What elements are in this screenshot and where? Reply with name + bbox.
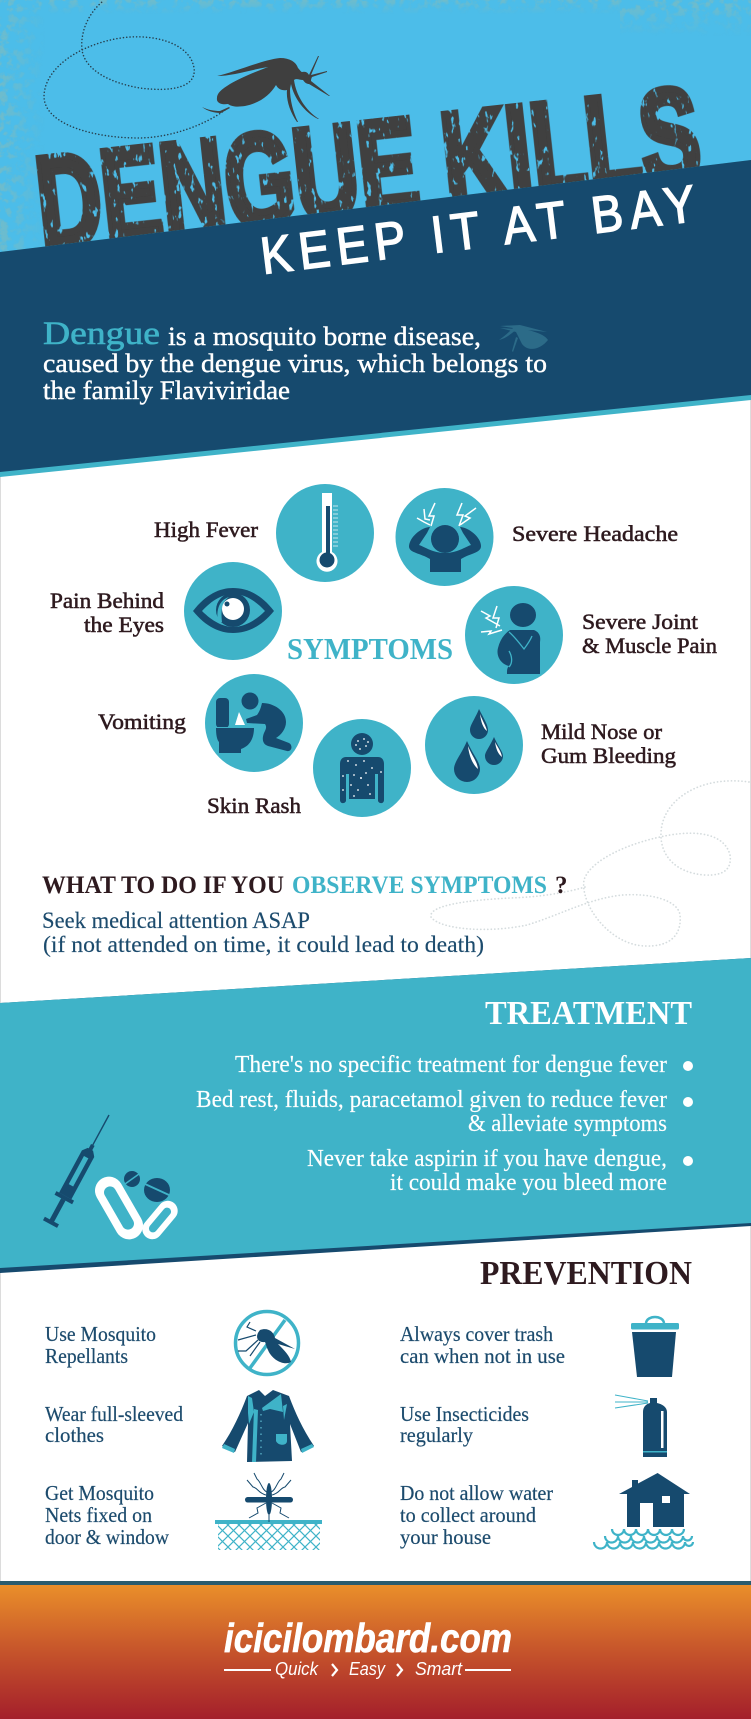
icon: house with water: [594, 1473, 693, 1548]
symptom: high fever: [154, 484, 374, 582]
symptom: skin rash: [207, 719, 411, 818]
header: grunge blue background: [0, 0, 751, 252]
subtitle: Keep it at bay: KEEP IT AT BAY: [257, 175, 699, 285]
intro text: the family Flaviviridae: [43, 376, 290, 405]
symptom: skin rash: Skin Rash: [207, 793, 301, 818]
footer logo text: icicilombard.com: [224, 1615, 512, 1661]
icon: trash can: [631, 1317, 679, 1377]
treatment list: Never take aspirin if you have dengue,: [307, 1146, 667, 1172]
item: full-sleeved clothes: clothes: [45, 1423, 104, 1447]
heading: what to do: WHAT TO DO IF YOU: [42, 872, 284, 899]
icon: pills: [90, 1171, 182, 1244]
icon: mosquito on net: [215, 1473, 322, 1550]
intro text: is a mosquito borne disease,: [168, 322, 481, 351]
panel: treatment: [0, 958, 751, 1273]
item: insecticides: regularly: [400, 1423, 473, 1447]
heading: what to do: ?: [555, 872, 568, 899]
footer tagline: Easy: [349, 1659, 386, 1679]
panel: intro dark band: [0, 160, 751, 477]
symptom: severe headache: [396, 488, 678, 586]
symptom: pain behind the eyes: [50, 562, 282, 660]
text: seek medical attention: (if not attended on time, it could lead to death): [43, 932, 484, 957]
item: mosquito repellants: Repellants: [45, 1344, 128, 1368]
symptom: pain behind the eyes: the Eyes: [84, 612, 164, 637]
footer: [0, 1581, 751, 1719]
symptom: nose or gum bleeding: Mild Nose or: [541, 719, 663, 744]
symptom: joint and muscle pain: Severe Joint: [582, 609, 699, 634]
heading: what to do: [42, 872, 568, 899]
item: mosquito nets: Get Mosquito: [45, 1481, 154, 1505]
item: full-sleeved clothes: Wear full-sleeved: [45, 1402, 183, 1426]
footer tagline: Quick: [275, 1659, 319, 1679]
panel: symptoms: [50, 484, 749, 946]
item: no standing water: to collect around: [400, 1503, 536, 1527]
item: insecticides: [400, 1395, 667, 1457]
footer tagline: [224, 1659, 511, 1679]
symptom: pain behind the eyes: Pain Behind: [50, 588, 164, 613]
heading: treatment: TREATMENT: [485, 995, 692, 1032]
item: mosquito repellants: Use Mosquito: [45, 1322, 156, 1346]
icon: faint mosquito: [499, 325, 548, 352]
treatment list: [196, 1052, 693, 1196]
intro text: caused by the dengue virus, which belongs to: [43, 349, 547, 378]
treatment list: There's no specific treatment for dengue fever: [235, 1052, 667, 1078]
treatment list: & alleviate symptoms: [468, 1111, 667, 1137]
heading: prevention: PREVENTION: [480, 1255, 692, 1292]
treatment list: Bed rest, fluids, paracetamol given to reduce fever: [196, 1087, 667, 1113]
symptom: vomiting: [98, 674, 303, 772]
icon: syringe: [41, 1110, 118, 1229]
symptom: joint and muscle pain: [465, 586, 717, 684]
icon: jacket: [222, 1390, 314, 1462]
footer tagline: Smart: [415, 1659, 463, 1679]
text: seek medical attention: Seek medical attention ASAP: [42, 908, 310, 933]
item: cover trash: can when not in use: [400, 1344, 565, 1368]
dotted background path: [431, 781, 749, 946]
item: insecticides: Use Insecticides: [400, 1402, 529, 1426]
item: mosquito nets: [45, 1473, 322, 1550]
item: cover trash: [400, 1317, 679, 1377]
item: mosquito nets: Nets fixed on: [45, 1503, 152, 1527]
symptom: joint and muscle pain: & Muscle Pain: [582, 633, 717, 658]
item: full-sleeved clothes: [45, 1390, 314, 1462]
icon: spray can: [615, 1395, 667, 1457]
intro text: Dengue: [43, 316, 160, 352]
item: no standing water: your house: [400, 1525, 491, 1549]
item: mosquito nets: door & window: [45, 1525, 169, 1549]
icon: no mosquito: [236, 1312, 298, 1374]
heading: what to do: OBSERVE SYMPTOMS: [292, 872, 547, 899]
symptom: high fever: High Fever: [154, 517, 259, 542]
icon: header mosquito: [202, 56, 330, 122]
item: no standing water: [400, 1473, 693, 1549]
intro text: [43, 316, 547, 405]
heading: symptoms: SYMPTOMS: [287, 631, 453, 666]
symptom: vomiting: Vomiting: [98, 709, 186, 734]
item: mosquito repellants: [45, 1312, 298, 1374]
treatment list: it could make you bleed more: [390, 1170, 667, 1196]
symptom: nose or gum bleeding: [425, 696, 676, 794]
symptom: severe headache: Severe Headache: [512, 521, 678, 546]
item: cover trash: Always cover trash: [400, 1322, 553, 1346]
symptom: nose or gum bleeding: Gum Bleeding: [541, 743, 676, 768]
text: seek medical attention: [42, 908, 484, 957]
dotted flight path of mosquito: [44, 2, 225, 138]
panel: prevention list: [45, 1312, 693, 1550]
item: no standing water: Do not allow water: [400, 1481, 553, 1505]
